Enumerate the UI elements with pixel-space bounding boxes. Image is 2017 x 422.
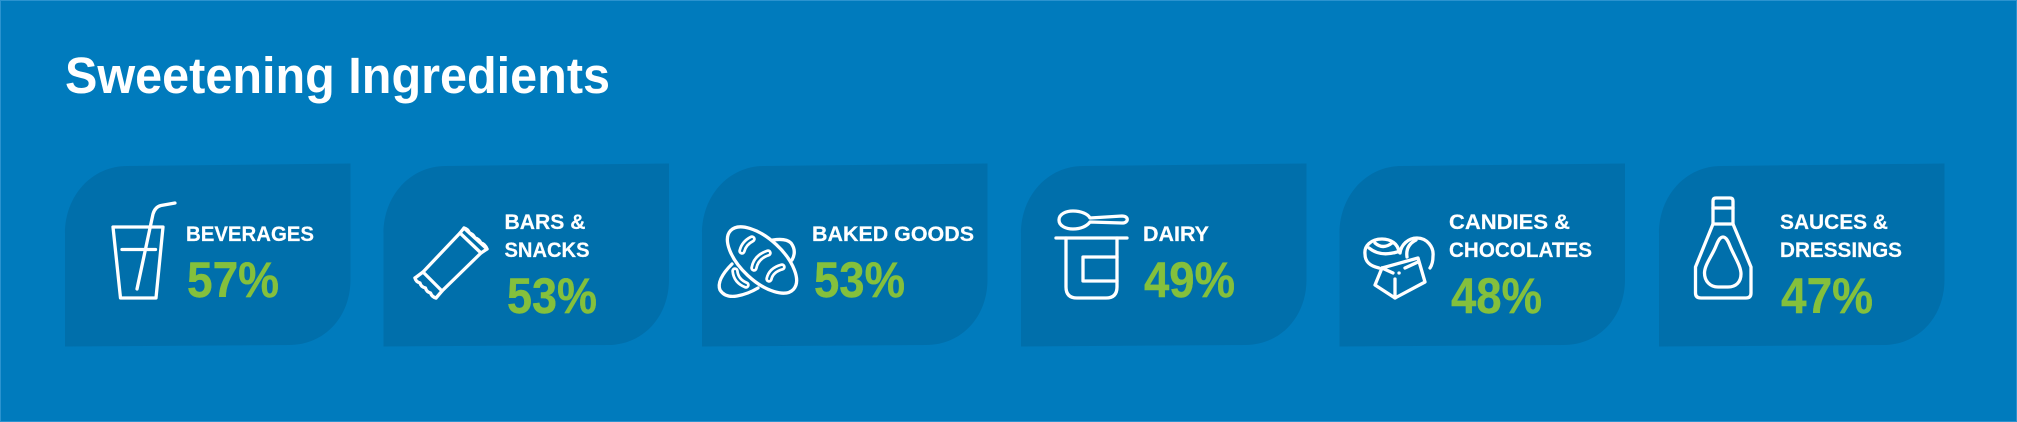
label: beverages: BEVERAGES — [186, 222, 314, 246]
label: candies and chocolates: CANDIES & — [1449, 210, 1570, 234]
panel: beverages — [65, 164, 350, 346]
value: 57%: 57% — [187, 252, 279, 308]
label: bars and snacks — [504, 210, 590, 262]
label: sauces and dressings: SAUCES & — [1780, 210, 1888, 234]
icon: snack bar — [415, 228, 487, 298]
value: 47%: 47% — [1781, 268, 1873, 324]
value: 48%: 48% — [1451, 268, 1542, 324]
title: Sweetening Ingredients — [65, 47, 610, 104]
panel: sauces and dressings — [1659, 164, 1944, 346]
label: candies and chocolates: CHOCOLATES — [1449, 238, 1592, 262]
value: 53%: 53% — [507, 268, 597, 324]
label: bars and snacks: BARS & — [504, 210, 586, 234]
icon: chocolates — [1365, 238, 1433, 298]
icon: yogurt cup and spoon — [1056, 211, 1127, 298]
value: 49%: 49% — [1144, 252, 1235, 308]
panel: candies and chocolates — [1340, 164, 1625, 346]
label: baked goods: BAKED GOODS — [812, 222, 974, 246]
panel: dairy — [1021, 164, 1306, 346]
label: candies and chocolates — [1449, 210, 1592, 262]
label: dairy: DAIRY — [1143, 222, 1209, 246]
label: sauces and dressings: DRESSINGS — [1780, 238, 1902, 262]
value: 53%: 53% — [814, 252, 905, 308]
icon: dressing bottle — [1696, 198, 1751, 298]
icon: drink glass with straw — [113, 203, 175, 298]
panel: bars and snacks — [384, 164, 669, 346]
panel: baked goods — [702, 164, 988, 346]
label: bars and snacks: SNACKS — [504, 238, 590, 262]
label: sauces and dressings — [1780, 210, 1902, 262]
icon: bread loaves — [716, 215, 808, 305]
